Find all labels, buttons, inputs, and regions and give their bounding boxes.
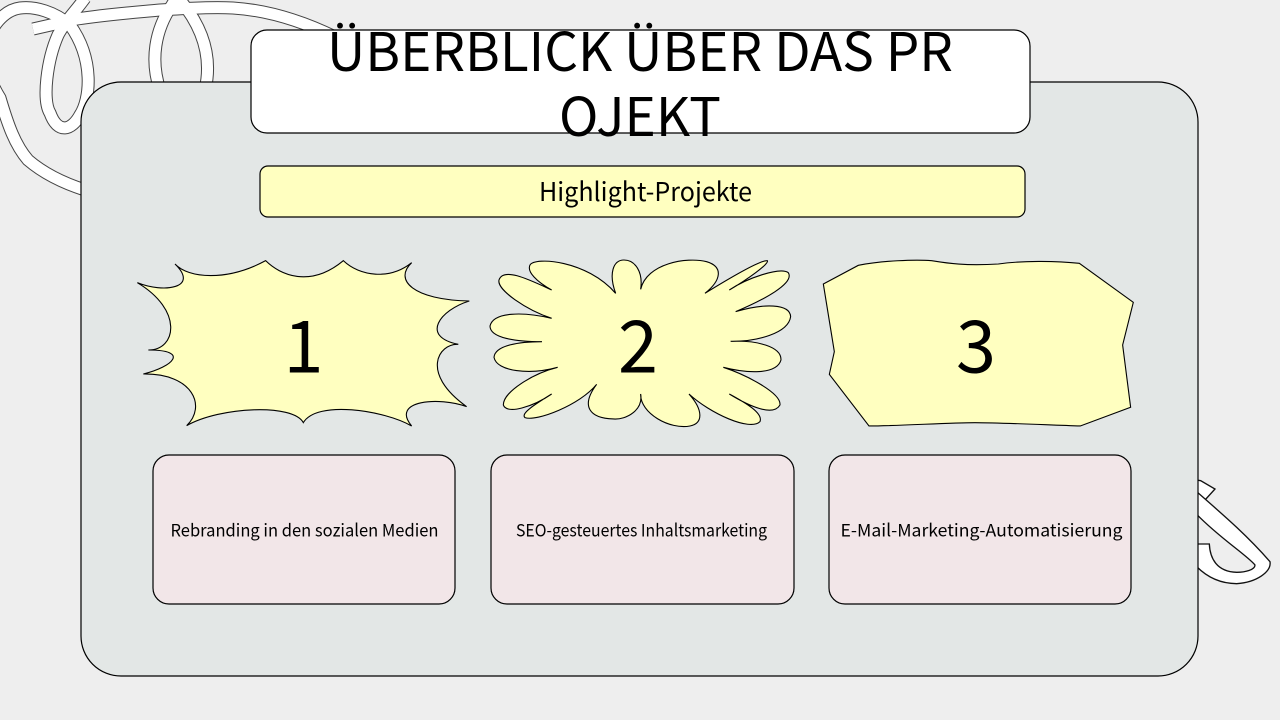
subheading: Highlight-Projekte [260, 166, 1025, 217]
card 1: social media rebranding: Rebranding in den sozialen Medien [170, 516, 438, 542]
card 2: SEO content marketing: SEO-gesteuertes Inhaltsmarketing [516, 516, 767, 542]
decorative ribbon: right [1197, 480, 1270, 584]
card 1: social media rebranding [153, 455, 455, 604]
card 2: SEO content marketing [491, 455, 794, 604]
title: OJEKT [559, 75, 721, 152]
decorative ribbon: top left [0, 0, 335, 190]
badge 2: petal shape [490, 260, 791, 427]
badge 3: rough polygon shape [823, 260, 1133, 426]
main panel [81, 82, 1198, 676]
badge 1: burst shape: 1 [284, 288, 323, 394]
card 3: email marketing automation [829, 455, 1131, 604]
badge 3: rough polygon shape: 3 [956, 288, 996, 394]
title [251, 10, 1030, 152]
card 3: email marketing automation: E-Mail-Marketing-Automatisierung [840, 516, 1123, 542]
badge 2: petal shape: 2 [618, 288, 658, 394]
badge 1: burst shape [137, 261, 469, 426]
subheading: Highlight-Projekte: Highlight-Projekte [539, 172, 752, 209]
title: ÜBERBLICK ÜBER DAS PR [327, 10, 953, 87]
